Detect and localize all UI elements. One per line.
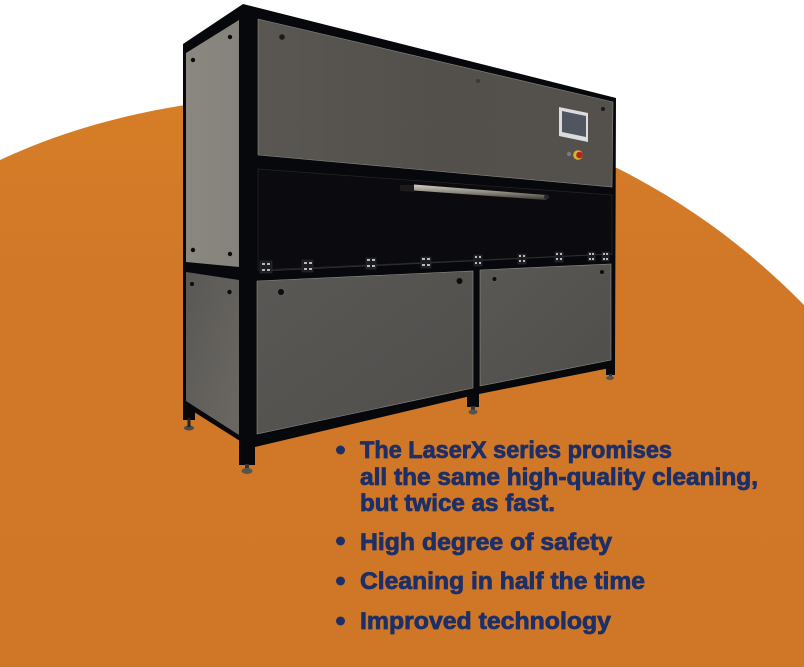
side panel screws (190, 35, 232, 294)
bullet: improved technology: Improved technology (360, 608, 611, 635)
bullet: LaserX series promises (336, 437, 758, 517)
hinges (260, 252, 609, 273)
door handle (400, 184, 549, 200)
top panel (258, 19, 613, 187)
side panel upper (186, 20, 239, 267)
lower panel screws (278, 270, 604, 295)
machine frame (183, 4, 616, 447)
bullet list (336, 437, 758, 635)
side panel lower (186, 272, 239, 435)
lower right panel (480, 264, 611, 386)
machine legs and feet (183, 362, 615, 474)
top panel screws (279, 34, 605, 111)
bullet: LaserX series promises: The LaserX series promises (360, 437, 672, 464)
hinge bolts (262, 253, 608, 271)
emergency stop button (567, 150, 583, 160)
black door (258, 169, 612, 270)
hinge line (262, 254, 612, 271)
bullet: cleaning in half the time: Cleaning in half the time (360, 568, 645, 595)
bullet: LaserX series promises: but twice as fast. (360, 490, 555, 517)
bullet: LaserX series promises: all the same high-quality cleaning, (360, 464, 758, 491)
machine: LaserX cleaning cabinet (183, 4, 616, 474)
lower left panel (257, 271, 473, 434)
control touchscreen (559, 107, 588, 142)
bullet: high degree of safety: High degree of safety (360, 529, 612, 556)
